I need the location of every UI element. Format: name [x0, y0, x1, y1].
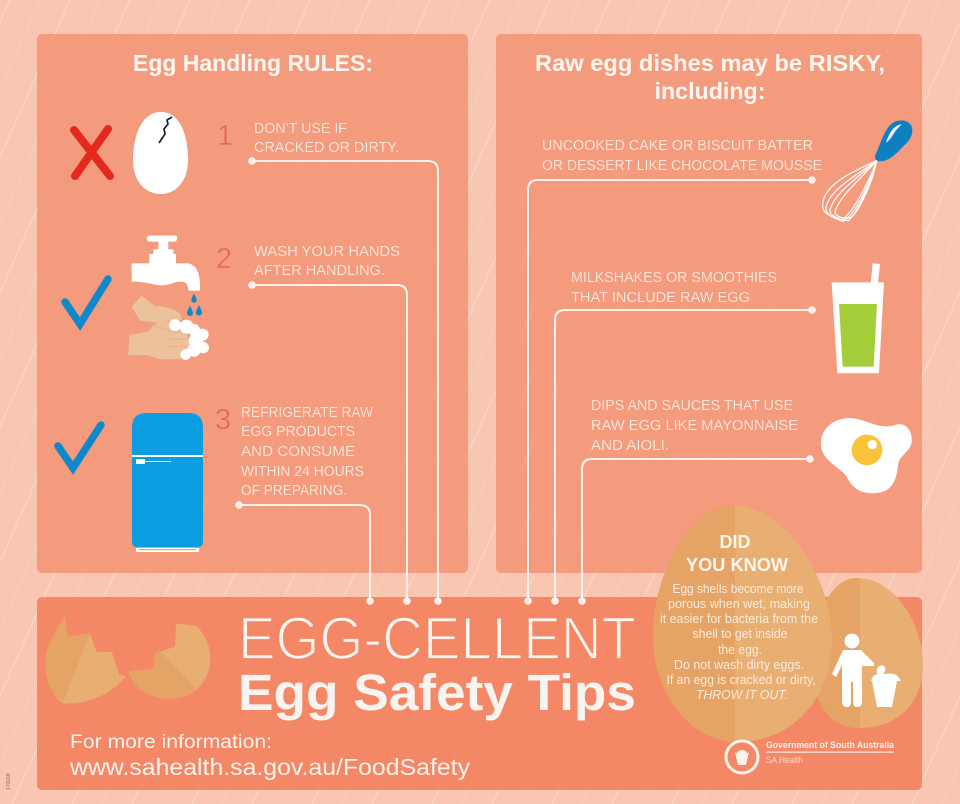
number 3: 3	[215, 404, 231, 436]
logo: Government of South Australia: Government of South Australia	[766, 740, 895, 751]
whisk handle	[875, 120, 912, 161]
number 1: 1	[217, 120, 233, 152]
connector: dish 2	[551, 306, 816, 605]
small egg with bin icon	[813, 578, 923, 728]
did you know body: Do not wash dirty eggs.	[674, 657, 804, 672]
heading: raw egg dishes: including:	[654, 78, 766, 104]
hands	[132, 296, 182, 323]
more information text: www.sahealth.sa.gov.au/FoodSafety	[69, 754, 471, 780]
heading: raw egg dishes	[535, 50, 885, 104]
icon: fried egg	[821, 418, 912, 493]
rule 1 text: DON’T USE IF	[254, 120, 347, 137]
rule 2 text	[254, 243, 400, 279]
rule 3 text	[241, 404, 374, 499]
did you know heading: DID	[720, 532, 750, 552]
panel: egg handling rules	[37, 34, 468, 573]
dish 3 text: AND AIOLI.	[591, 437, 669, 454]
icon: broken egg shells	[45, 617, 210, 704]
rule 2 text: WASH YOUR HANDS	[254, 243, 400, 260]
dish 3 text: DIPS AND SAUCES THAT USE	[591, 397, 793, 414]
rule 1 text	[254, 120, 399, 156]
title	[238, 605, 636, 721]
panel: raw egg dishes	[496, 34, 922, 573]
did you know body: it easier for bacteria from the	[660, 611, 818, 626]
logo: Government of South Australia: SA Health	[766, 755, 803, 765]
icon: red cross	[74, 129, 110, 176]
dish 1 text: OR DESSERT LIKE CHOCOLATE MOUSSE	[542, 157, 822, 174]
panel: footer banner	[37, 597, 922, 790]
rule 3 text: EGG PRODUCTS	[241, 423, 355, 440]
rule 3 text: OF PREPARING.	[241, 482, 347, 499]
did you know body: Egg shells become more	[672, 581, 804, 596]
icon: blue tick	[65, 279, 108, 324]
icon: green smoothie glass	[832, 263, 884, 373]
did you know body: THROW IT OUT.	[696, 687, 788, 702]
connector: rule 2	[248, 281, 411, 605]
title: Egg Safety Tips	[238, 664, 636, 721]
water drops	[187, 293, 202, 316]
icon: tap and washing hands	[128, 236, 209, 360]
did you know egg	[653, 505, 832, 742]
did you know heading	[686, 532, 788, 575]
dish 2 text: MILKSHAKES OR SMOOTHIES	[571, 269, 777, 286]
rule 1 text: CRACKED OR DIRTY.	[254, 139, 399, 156]
rule 3 text: REFRIGERATE RAW	[241, 404, 374, 421]
did you know heading: YOU KNOW	[686, 555, 788, 575]
connector: rule 1	[248, 157, 442, 605]
print code: 170018	[6, 773, 12, 790]
rule 2 text: AFTER HANDLING.	[254, 262, 385, 279]
icon: fridge	[132, 413, 203, 552]
icon: cracked egg	[133, 112, 188, 194]
icon: whisk	[823, 120, 912, 221]
tap	[132, 236, 200, 291]
heading: egg handling rules: Egg Handling RULES:	[133, 50, 373, 76]
connector: dish 1	[524, 176, 816, 605]
number 2: 2	[216, 243, 232, 275]
rule 3 text: AND CONSUME	[241, 443, 355, 460]
more information text	[69, 732, 471, 780]
dish 2 text	[571, 269, 777, 306]
connector: rule 3	[235, 501, 374, 605]
soap foam	[169, 319, 209, 360]
did you know body	[660, 581, 818, 702]
connector: dish 3	[578, 455, 814, 605]
did you know body: shell to get inside	[692, 626, 788, 641]
did you know body: the egg.	[718, 642, 762, 657]
did you know body: porous when wet, making	[668, 596, 810, 611]
heading: raw egg dishes: Raw egg dishes may be RISKY,	[535, 50, 885, 76]
title: EGG-CELLENT	[238, 605, 636, 672]
dish 2 text: THAT INCLUDE RAW EGG	[571, 289, 750, 306]
icon: person throwing egg in bin	[832, 634, 901, 707]
icon: blue tick	[58, 425, 101, 468]
more information text: For more information:	[70, 732, 272, 753]
rule 3 text: WITHIN 24 HOURS	[241, 463, 364, 480]
dish 1 text: UNCOOKED CAKE OR BISCUIT BATTER	[542, 137, 813, 154]
dish 3 text: RAW EGG LIKE MAYONNAISE	[591, 417, 798, 434]
dish 1 text	[542, 137, 822, 174]
logo: Government of South Australia	[726, 740, 895, 773]
did you know body: If an egg is cracked or dirty,	[666, 672, 816, 687]
whisk wires	[823, 161, 877, 221]
dish 3 text	[591, 397, 798, 454]
